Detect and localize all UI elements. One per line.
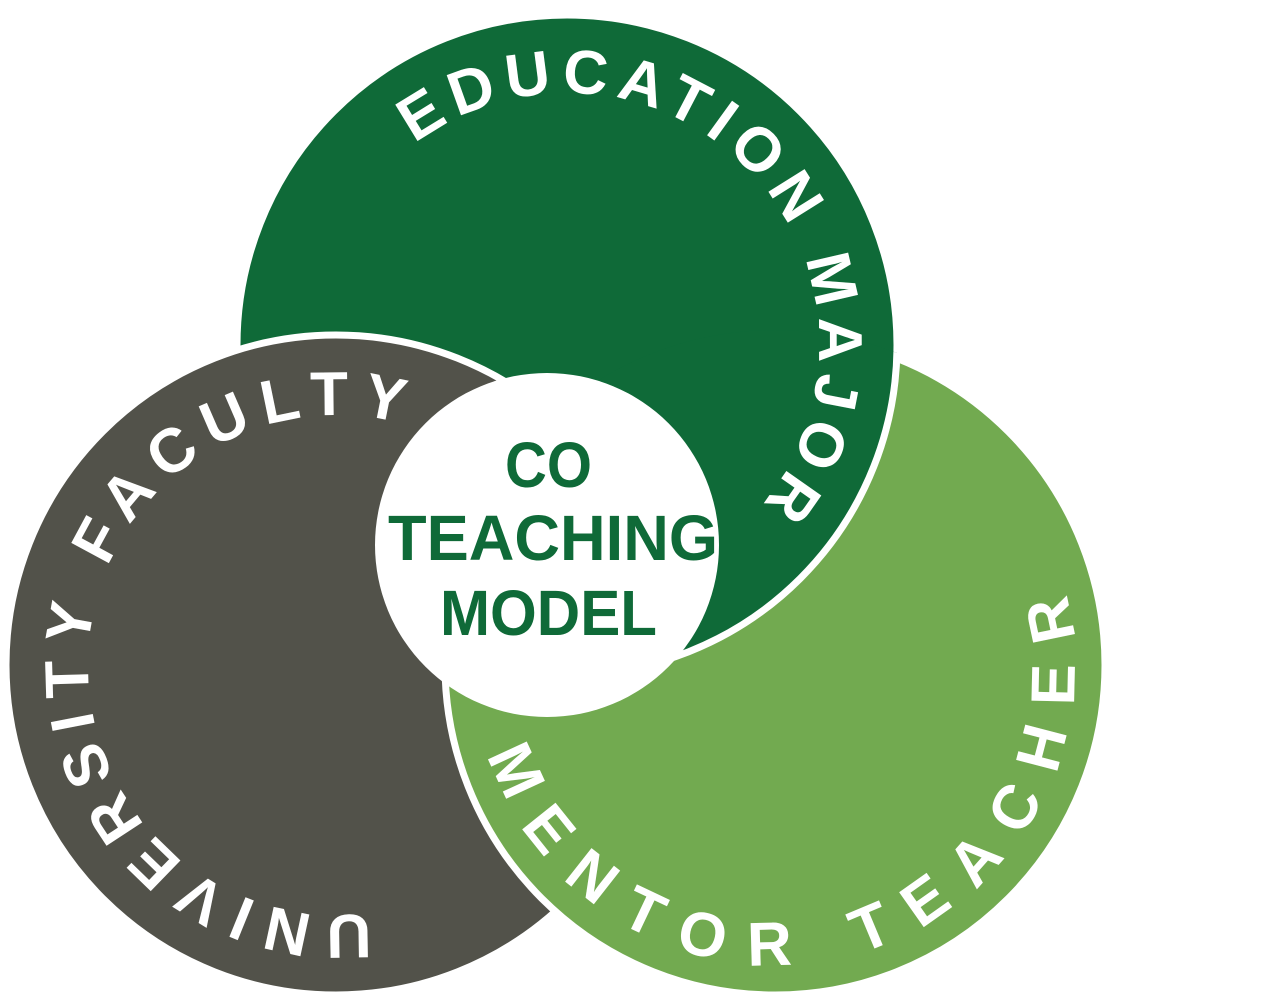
circle: education major (237, 15, 897, 675)
center title (388, 429, 718, 649)
label: university faculty: UNIVERSITY FACULTY (45, 372, 409, 958)
circle: university faculty (6, 335, 666, 995)
center title: MODEL (440, 577, 657, 649)
center title: CO (505, 429, 592, 501)
label: mentor teacher: MENTOR TEACHER (488, 595, 1075, 966)
center title: TEACHING (388, 502, 718, 574)
circle: mentor teacher (445, 335, 1105, 995)
center circle (375, 373, 719, 717)
label: education major: EDUCATION MAJOR (395, 50, 862, 522)
circle overlap: education major over mentor teacher (600, 332, 900, 661)
